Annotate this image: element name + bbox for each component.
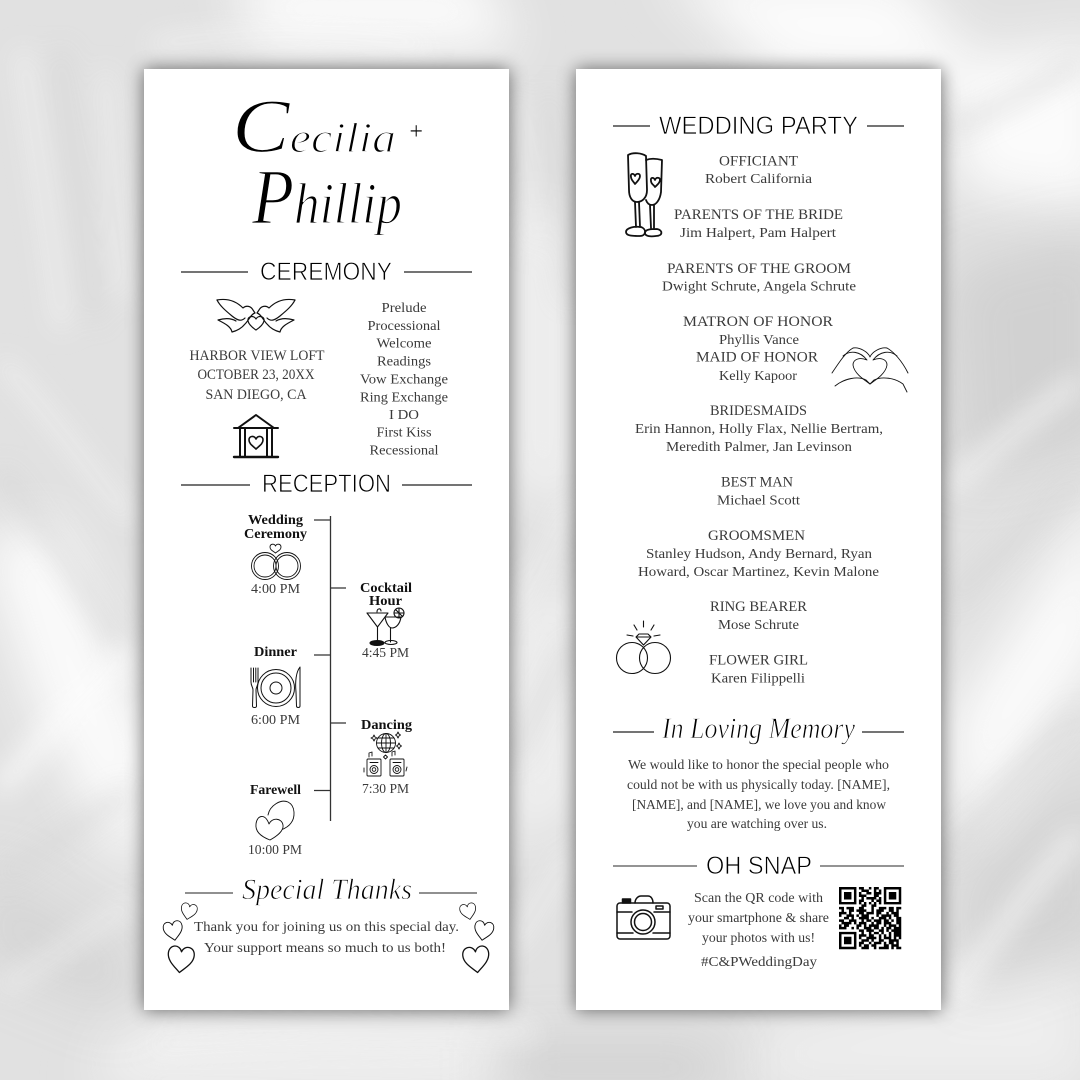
icon: plate fork and knife xyxy=(251,667,300,708)
text block: qr instructions xyxy=(688,891,829,970)
text block: thank you message: Thank you for joining us on this special day. xyxy=(194,920,459,935)
text block: officiant and parents: Robert California xyxy=(705,172,813,187)
text block: honor attendants: Phyllis Vance xyxy=(719,333,799,348)
text block: ceremony order list: First Kiss xyxy=(376,426,432,441)
icon: hearts left xyxy=(162,902,198,974)
timeline item: wedding ceremony: Wedding xyxy=(248,513,303,528)
text block: ceremony order list: Ring Exchange xyxy=(360,390,448,406)
heading: special thanks: Special Thanks xyxy=(242,873,412,906)
text block: venue and date xyxy=(190,348,325,403)
text block: honor attendants xyxy=(683,314,833,384)
text block: honor attendants: MAID OF HONOR xyxy=(696,350,818,366)
text block: officiant and parents: OFFICIANT xyxy=(719,154,798,170)
panel: left card shadow and surface xyxy=(144,69,509,1010)
text block: ceremony order list: Readings xyxy=(377,354,431,370)
text block: ring bearer and flower girl: RING BEARER xyxy=(710,599,807,615)
text block: ceremony order list: Vow Exchange xyxy=(360,372,448,388)
timeline item: cocktail hour: 4:45 PM xyxy=(362,646,410,661)
text block: ceremony order list: Processional xyxy=(368,319,441,334)
text block: officiant and parents: PARENTS OF THE GROOM xyxy=(667,261,851,277)
text block: bridesmaids xyxy=(635,403,883,455)
icon: heart hands xyxy=(832,348,908,392)
heading: oh snap: OH SNAP xyxy=(706,852,812,880)
icon: two doves with heart xyxy=(217,299,295,332)
text block: ring bearer and flower girl: Karen Filippelli xyxy=(711,672,805,686)
text block: best man xyxy=(717,475,800,508)
title: couple names: Phillip xyxy=(251,153,402,240)
text block: ring bearer and flower girl xyxy=(709,599,808,686)
icon: wedding rings with heart xyxy=(252,544,300,580)
text block: ring bearer and flower girl: FLOWER GIRL xyxy=(709,652,808,668)
text block: thank you message xyxy=(194,920,459,956)
text block: venue and date: HARBOR VIEW LOFT xyxy=(190,348,325,364)
text block: bridesmaids: Erin Hannon, Holly Flax, Nellie Bertram, xyxy=(635,422,883,437)
timeline item: dinner: Dinner xyxy=(254,645,297,660)
text block: officiant and parents: Dwight Schrute, Angela Schrute xyxy=(662,280,856,294)
text block: memorial message: you are watching over us. xyxy=(687,817,827,832)
text block: honor attendants: MATRON OF HONOR xyxy=(683,314,833,330)
text block: groomsmen: Howard, Oscar Martinez, Kevin Malone xyxy=(638,565,879,580)
text block: venue and date: SAN DIEGO, CA xyxy=(206,387,307,403)
heading: ceremony: CEREMONY xyxy=(260,258,392,286)
text block: thank you message: Your support means so much to us both! xyxy=(204,941,446,956)
text block: ceremony order list: Welcome xyxy=(376,336,432,352)
timeline item: dancing xyxy=(361,718,412,797)
panel: right card shadow and surface xyxy=(576,69,941,1010)
text block: groomsmen: GROOMSMEN xyxy=(708,528,806,544)
timeline item: wedding ceremony: 4:00 PM xyxy=(251,582,301,597)
timeline: spine and ticks xyxy=(314,516,346,821)
timeline item: dancing: 7:30 PM xyxy=(362,782,410,797)
text block: groomsmen xyxy=(638,528,879,580)
qr code xyxy=(839,888,901,948)
text block: qr instructions: your photos with us! xyxy=(702,931,815,946)
text block: best man: BEST MAN xyxy=(721,475,794,491)
text block: qr instructions: #C&PWeddingDay xyxy=(701,955,817,970)
text block: best man: Michael Scott xyxy=(717,494,800,508)
text block: memorial message: [NAME], and [NAME], we love you and know xyxy=(632,798,887,813)
text block: qr instructions: your smartphone & share xyxy=(688,911,829,926)
text block: memorial message xyxy=(627,758,890,832)
text block: memorial message: We would like to honor the special people who xyxy=(628,758,889,773)
timeline item: dinner xyxy=(251,645,301,728)
timeline item: wedding ceremony xyxy=(244,513,307,597)
icon: two hearts xyxy=(256,801,294,840)
text block: bridesmaids: BRIDESMAIDS xyxy=(710,403,807,419)
icon: rings with diamond xyxy=(616,621,670,674)
heading: reception: RECEPTION xyxy=(262,470,391,498)
timeline item: cocktail hour: Hour xyxy=(369,594,402,609)
icon: hearts right xyxy=(459,902,495,974)
icon: disco ball and speakers xyxy=(364,732,407,776)
timeline item: farewell: Farewell xyxy=(250,783,301,798)
text block: ceremony order list: I DO xyxy=(389,408,419,423)
timeline item: dancing: Dancing xyxy=(361,718,412,733)
text block: groomsmen: Stanley Hudson, Andy Bernard, Ryan xyxy=(646,547,872,562)
title: couple names: + xyxy=(408,119,424,145)
text block: ring bearer and flower girl: Mose Schrute xyxy=(718,618,799,633)
timeline item: cocktail hour: Cocktail xyxy=(360,581,412,596)
timeline item: farewell: 10:00 PM xyxy=(248,843,303,858)
text block: officiant and parents xyxy=(662,154,856,294)
text block: venue and date: OCTOBER 23, 20XX xyxy=(198,367,315,383)
title: couple names xyxy=(232,85,424,240)
text block: honor attendants: Kelly Kapoor xyxy=(719,369,797,384)
text block: qr instructions: Scan the QR code with xyxy=(694,891,823,906)
heading: wedding party: WEDDING PARTY xyxy=(659,112,858,140)
icon: cocktail glasses xyxy=(367,608,404,646)
text block: officiant and parents: Jim Halpert, Pam Halpert xyxy=(680,226,836,241)
heading: in loving memory: In Loving Memory xyxy=(661,712,856,745)
text block: ceremony order list: Recessional xyxy=(370,443,439,458)
timeline item: cocktail hour xyxy=(360,581,412,661)
timeline item: dinner: 6:00 PM xyxy=(251,713,301,728)
text block: bridesmaids: Meredith Palmer, Jan Levinson xyxy=(666,440,852,455)
icon: champagne flutes xyxy=(626,153,662,236)
text block: officiant and parents: PARENTS OF THE BRIDE xyxy=(674,207,843,223)
timeline item: farewell xyxy=(248,783,303,858)
icon: chapel house xyxy=(234,415,278,457)
text block: ceremony order list: Prelude xyxy=(382,301,426,316)
icon: camera xyxy=(617,896,670,939)
text block: ceremony order list xyxy=(360,301,448,458)
text block: memorial message: could not be with us physically today. [NAME], xyxy=(627,778,890,793)
timeline item: wedding ceremony: Ceremony xyxy=(244,527,307,542)
title: couple names: Cecilia xyxy=(232,85,396,169)
